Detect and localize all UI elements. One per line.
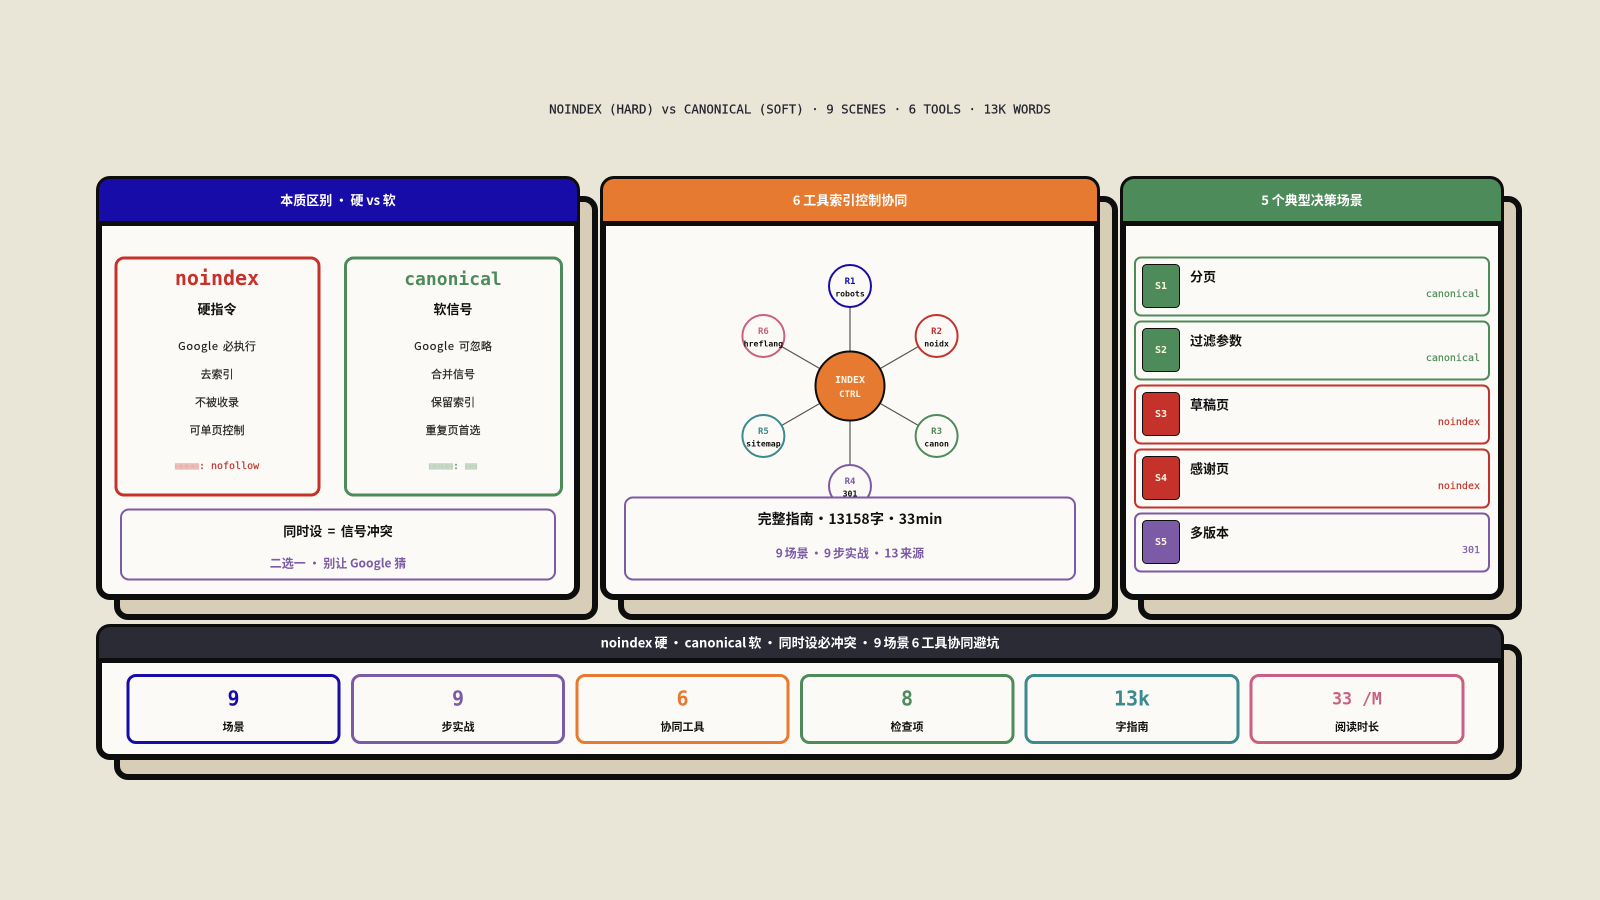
- stat: steps: 步实战: [442, 718, 474, 734]
- heading: six tools: 6 工具索引控制协同: [793, 190, 907, 209]
- node: index control hub: CTRL: [839, 390, 861, 400]
- stat: checks: [802, 676, 1013, 742]
- node: R2 noidx: R2: [931, 327, 942, 337]
- callout: guide summary: [625, 498, 1075, 580]
- stat: reading time: [1251, 676, 1463, 742]
- node: R2 noidx: [916, 315, 958, 357]
- stat: tools: 协同工具: [660, 718, 704, 734]
- hub diagram: [742, 265, 958, 507]
- stat: words: 13k: [1114, 686, 1150, 710]
- card: canonical: [346, 258, 562, 495]
- node: R6 hreflang: [742, 315, 784, 357]
- scene row S4: S4: [1155, 473, 1167, 484]
- scene row S4: [1135, 450, 1489, 508]
- stat: words: 字指南: [1116, 718, 1148, 734]
- heading: summary: noindex 硬 · canonical 软 · 同时设必冲突 · 9 场景 6 工具协同避坑: [601, 632, 999, 652]
- stat: steps: 9: [452, 686, 464, 710]
- scene row S3: [1135, 386, 1489, 444]
- scene row S3: S3: [1155, 409, 1167, 420]
- card: noindex: Google 必执行: [178, 338, 256, 354]
- scene row S4: noindex: [1438, 481, 1480, 492]
- scene row S5: 多版本: [1190, 522, 1229, 542]
- stat: steps: [352, 676, 564, 742]
- panel: five scenes: [1120, 179, 1519, 617]
- stat: tools: 6: [676, 686, 689, 710]
- node: R2 noidx: noidx: [924, 338, 949, 348]
- card: noindex: 硬指令: [197, 299, 237, 318]
- node: R5 sitemap: sitemap: [746, 438, 781, 448]
- node: R1 robots: R1: [845, 277, 855, 287]
- node: R6 hreflang: R6: [758, 327, 769, 337]
- node: R6 hreflang: hreflang: [744, 338, 783, 348]
- card: canonical: 软信号: [433, 299, 473, 318]
- scene row S5: 301: [1462, 545, 1480, 556]
- scene row S1: 分页: [1190, 266, 1216, 286]
- scene row S3: 草稿页: [1190, 394, 1229, 414]
- panel: summary stats: [96, 627, 1519, 777]
- scene row S2: [1135, 322, 1489, 380]
- callout: signal conflict: [121, 510, 555, 580]
- panel: essential difference: [96, 179, 595, 617]
- node: R1 robots: robots: [835, 288, 865, 298]
- stat: reading time: 阅读时长: [1335, 718, 1379, 734]
- card: canonical: Google 可忽略: [414, 338, 492, 354]
- heading: five scenes: 5 个典型决策场景: [1261, 190, 1363, 209]
- panel: six tools: [600, 179, 1115, 617]
- scene row S1: [1135, 258, 1489, 316]
- stat: words: [1026, 676, 1238, 742]
- scene row S5: S5: [1155, 537, 1167, 548]
- card: canonical: ▩▩▩▩: ▩▩: [429, 461, 477, 472]
- callout: guide summary: 9 场景 · 9 步实战 · 13 来源: [776, 544, 924, 562]
- node: R5 sitemap: [742, 415, 784, 457]
- card: noindex: [116, 258, 319, 495]
- stat: reading time: 33 /M: [1332, 690, 1382, 708]
- scene row S3: noindex: [1438, 417, 1480, 428]
- node: index control hub: INDEX: [835, 375, 865, 386]
- node: R3 canon: canon: [924, 438, 949, 448]
- card: canonical: 合并信号: [431, 366, 475, 382]
- stat: checks: 检查项: [890, 718, 924, 734]
- node: R1 robots: [829, 265, 871, 307]
- node: R4 301: R4: [845, 477, 856, 487]
- scene row S2: canonical: [1426, 353, 1480, 364]
- scene row S2: S2: [1155, 345, 1167, 356]
- callout: guide summary: 完整指南 · 13158 字 · 33 min: [758, 509, 942, 529]
- callout: signal conflict: 二选一 · 别让 Google 猜: [270, 554, 406, 572]
- scene row S2: 过滤参数: [1190, 330, 1242, 350]
- callout: signal conflict: 同时设 = 信号冲突: [283, 521, 393, 540]
- node: R3 canon: [916, 415, 958, 457]
- subtitle: NOINDEX (HARD) vs CANONICAL (SOFT) · 9 SCENES · 6 TOOLS · 13K WORDS: [549, 102, 1051, 116]
- card: canonical: 保留索引: [431, 394, 475, 410]
- node: R5 sitemap: R5: [758, 427, 769, 437]
- card: canonical: canonical: [404, 269, 502, 290]
- stat: scenes: 场景: [222, 718, 244, 734]
- card: noindex: ▩▩▩▩: nofollow: [175, 461, 260, 472]
- node: R3 canon: R3: [931, 427, 942, 437]
- card: noindex: 可单页控制: [190, 422, 244, 438]
- stat: scenes: [128, 676, 339, 742]
- scene row S1: S1: [1155, 281, 1167, 292]
- stat: checks: 8: [901, 686, 913, 710]
- scene row S1: canonical: [1426, 289, 1480, 300]
- heading: essential difference: 本质区别 · 硬 vs 软: [280, 190, 396, 209]
- node: index control hub: [816, 352, 884, 420]
- card: noindex: noindex: [175, 266, 259, 290]
- stat: tools: [577, 676, 788, 742]
- node: R4 301: [829, 465, 871, 507]
- card: canonical: 重复页首选: [426, 422, 480, 438]
- scene row S4: 感谢页: [1190, 458, 1229, 478]
- card: noindex: 去索引: [200, 366, 234, 382]
- card: noindex: 不被收录: [195, 394, 239, 410]
- scene row S5: [1135, 514, 1489, 572]
- node: R4 301: 301: [843, 488, 857, 498]
- stat: scenes: 9: [227, 686, 240, 710]
